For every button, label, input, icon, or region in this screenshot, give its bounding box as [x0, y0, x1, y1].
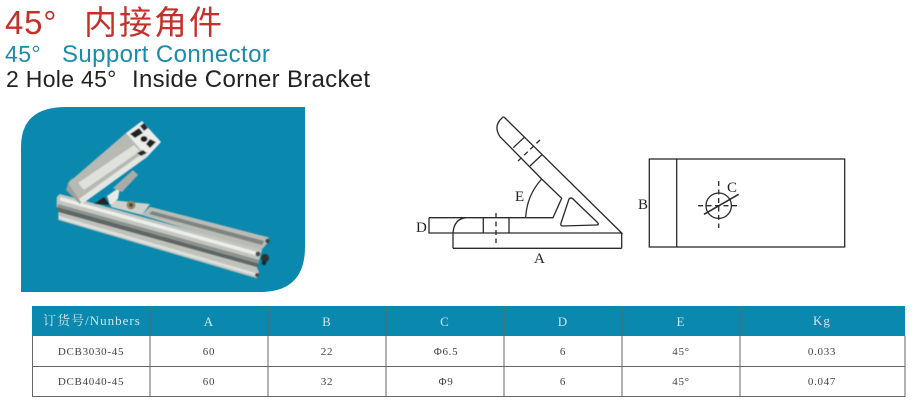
title: Chinese heading — [5, 4, 224, 41]
table row DCB4040-45: 0.047 — [808, 376, 836, 388]
middle profile — [57, 194, 262, 263]
title: Chinese heading: 内接角件 — [84, 4, 224, 41]
table row DCB3030-45: 45° — [672, 346, 690, 358]
table header labels: 订货号/Nunbers — [43, 313, 141, 328]
table header labels: B — [322, 314, 332, 329]
table row DCB4040-45 — [58, 376, 836, 388]
label letters — [638, 180, 737, 213]
connector shadow — [94, 197, 110, 205]
table row DCB3030-45: Φ6.5 — [434, 346, 458, 358]
bottom profile — [58, 212, 259, 278]
hole diameter leader — [704, 194, 739, 214]
upper profile edge — [79, 153, 147, 204]
hole centre lines — [496, 140, 540, 243]
subtitle: Support Connector: 45° — [5, 41, 41, 67]
plate fold line — [676, 159, 678, 247]
table row DCB4040-45: DCB4040-45 — [58, 376, 124, 388]
connector plate — [111, 200, 150, 215]
upper profile groove — [78, 145, 140, 190]
middle profile highlight — [60, 197, 261, 256]
table header labels: A — [204, 314, 214, 329]
label letters — [416, 189, 545, 267]
label letters: E — [515, 189, 524, 205]
subtitle: Inside Corner Bracket — [6, 66, 370, 93]
label letters: D — [416, 220, 427, 236]
table header band — [32, 306, 905, 336]
subtitle: Inside Corner Bracket: Inside Corner Bracket — [132, 66, 370, 93]
table header labels: C — [440, 314, 450, 329]
label letters: A — [534, 251, 545, 267]
table header labels: E — [677, 314, 685, 329]
table row DCB3030-45: 22 — [321, 346, 333, 358]
table header labels: Kg — [813, 313, 831, 328]
upper hole lines — [513, 137, 542, 166]
table row DCB3030-45: 6 — [560, 346, 566, 358]
label letters: C — [727, 180, 737, 196]
table row DCB4040-45: 6 — [560, 376, 566, 388]
upper profile tail — [66, 178, 82, 204]
bottom profile highlight — [59, 216, 256, 276]
plate outline — [649, 159, 845, 247]
outer outline — [429, 117, 622, 248]
table header labels: D — [558, 314, 568, 329]
table rules — [32, 306, 905, 396]
table row DCB3030-45 — [58, 346, 836, 358]
diagram: top view — [638, 159, 845, 247]
title: Chinese heading: 45° — [5, 4, 57, 41]
rear profile groove — [149, 211, 264, 245]
profile end faces — [255, 239, 270, 277]
label letters: B — [638, 197, 648, 213]
table header labels — [43, 313, 831, 329]
upper profile end face — [126, 121, 161, 157]
rear lower profile — [142, 207, 269, 252]
dimension E arc — [526, 179, 542, 217]
upper profile face — [68, 133, 147, 204]
table row DCB3030-45: 60 — [203, 346, 215, 358]
table row DCB3030-45: 0.033 — [808, 346, 836, 358]
subtitle: Inside Corner Bracket: 2 Hole 45° — [6, 66, 117, 92]
table row DCB4040-45: Φ9 — [439, 376, 453, 388]
lower hole lines — [483, 218, 509, 233]
table row DCB4040-45: 60 — [203, 376, 215, 388]
bolt — [126, 200, 136, 210]
diagram: side view — [416, 117, 622, 267]
table: order numbers and dimensions — [32, 306, 905, 396]
middle profile lower shade — [58, 204, 259, 263]
dimension D — [429, 218, 453, 233]
gap between profiles — [57, 207, 258, 268]
hole crosshair — [698, 181, 738, 228]
table row DCB4040-45: 45° — [672, 376, 690, 388]
table row DCB3030-45: DCB3030-45 — [58, 346, 124, 358]
photo: aluminium profile assembly — [57, 121, 270, 278]
connector support — [107, 187, 120, 205]
triangular cutout — [561, 198, 598, 226]
dimension A — [453, 233, 622, 248]
table row DCB4040-45: 32 — [321, 376, 333, 388]
small bracket wing — [113, 170, 138, 192]
subtitle: Support Connector: Support Connector — [62, 41, 270, 68]
hole circle — [706, 193, 731, 218]
panel: teal product photo background — [21, 107, 305, 292]
